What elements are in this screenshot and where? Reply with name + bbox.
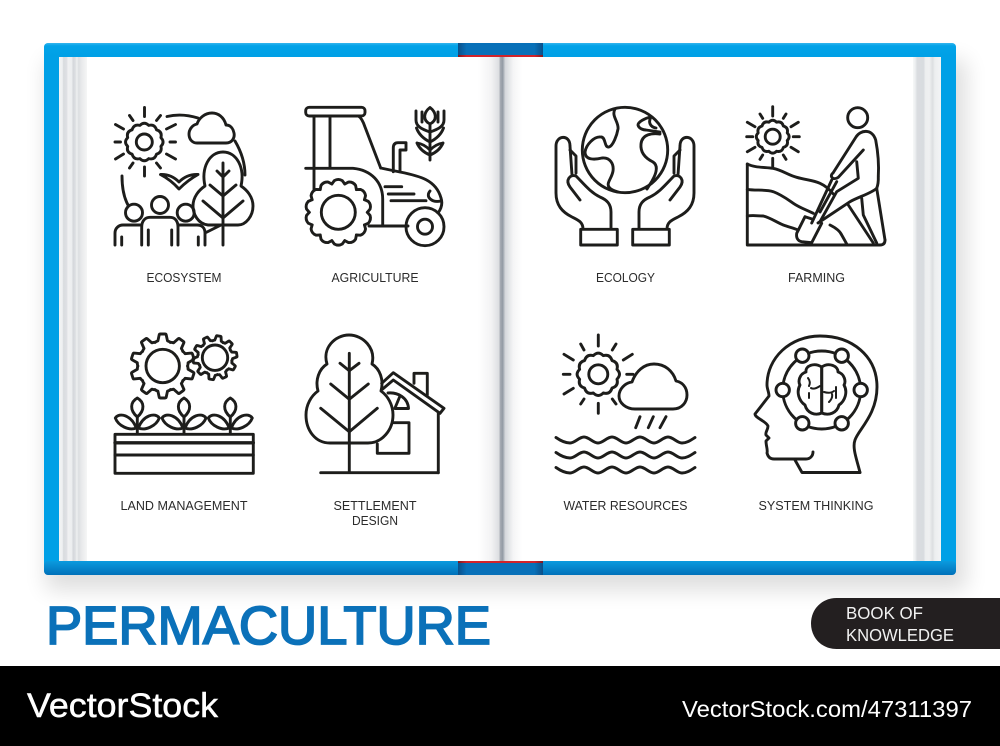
label: ECOSYSTEM	[146, 270, 222, 285]
open book	[44, 43, 956, 575]
item: ecology	[556, 107, 694, 285]
item: agriculture	[305, 107, 444, 285]
white pages	[59, 57, 941, 561]
badge: book of knowledge: KNOWLEDGE	[846, 625, 954, 645]
icon: person digging	[747, 107, 885, 245]
top spine tab	[458, 43, 543, 57]
icon: gears and plants	[115, 332, 253, 473]
bottom spine tab	[458, 561, 543, 575]
item: ecosystem	[115, 108, 253, 285]
footer bar	[0, 666, 1000, 746]
icon: head with brain network	[755, 336, 877, 472]
item: settlement design	[306, 335, 444, 528]
left page edges	[59, 57, 87, 561]
icon: ecosystem	[115, 108, 253, 245]
label: SYSTEM THINKING	[758, 498, 874, 513]
book drop shadow	[46, 60, 966, 590]
icon: hands holding globe	[556, 107, 694, 245]
item: land management	[115, 332, 253, 513]
icon: tree and house	[306, 335, 444, 473]
label	[334, 498, 417, 528]
footer logo: VectorStock	[27, 687, 219, 725]
item: water resources	[556, 335, 695, 513]
label: LAND MANAGEMENT	[120, 498, 248, 513]
centre gutter shading	[478, 57, 522, 561]
label: SETTLEMENT	[334, 498, 417, 513]
badge: book of knowledge	[811, 598, 1000, 649]
icon: sun, rain cloud and waves	[556, 335, 695, 473]
footer url: VectorStock.com/47311397	[682, 696, 972, 722]
item: system thinking	[755, 336, 877, 513]
blue book cover	[44, 43, 956, 575]
label: DESIGN	[352, 513, 398, 528]
label: ECOLOGY	[596, 270, 655, 285]
label: WATER RESOURCES	[564, 498, 688, 513]
right page edges	[913, 57, 941, 561]
item: farming	[747, 107, 885, 285]
label: AGRICULTURE	[332, 270, 419, 285]
badge: book of knowledge: BOOK OF	[846, 603, 923, 623]
label: FARMING	[788, 270, 845, 285]
title: PERMACULTURE	[46, 596, 491, 656]
icon: tractor and wheat	[305, 107, 444, 246]
